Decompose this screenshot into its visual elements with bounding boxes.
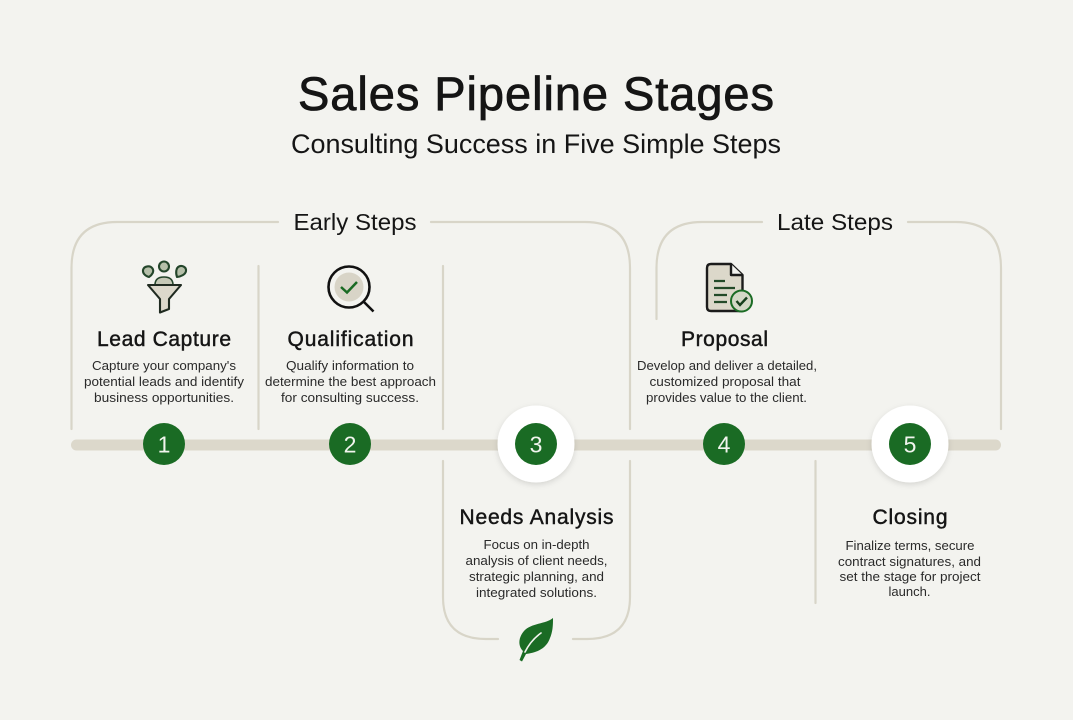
step 5: closing: Closing [872,506,948,529]
step 2: qualification: determine the best approach [265,375,436,389]
step 2: qualification [265,328,436,405]
step 4: proposal: customized proposal that [650,375,801,389]
step 3 marker: 3 [530,432,542,458]
step 1 marker [143,423,185,465]
bracket: late steps [656,222,1001,603]
step 3: needs analysis: analysis of client needs, [466,554,608,568]
step 3: needs analysis: integrated solutions. [476,586,597,600]
heading: early steps: Early Steps [294,209,416,235]
icon: leaf [519,618,553,662]
step 2 marker: 2 [344,432,356,458]
step 5: closing [838,506,981,599]
step 5 marker [872,406,948,482]
title: Sales Pipeline Stages [298,67,774,120]
step 1: lead capture [84,328,245,405]
icon: proposal document [707,264,752,312]
step 4 marker: 4 [718,432,731,458]
step 4 marker [703,423,745,465]
step 5: closing: Finalize terms, secure [846,539,975,553]
bracket: early steps [72,222,630,639]
step 1: lead capture: Lead Capture [97,328,231,351]
step 4: proposal [637,328,817,405]
step 3: needs analysis [460,506,614,600]
step 2: qualification: Qualify information to [286,359,414,373]
step 5 marker: 5 [904,432,916,458]
step 4: proposal: provides value to the client. [646,391,807,405]
step 5: closing: launch. [888,585,930,599]
timeline track [71,440,1001,450]
step 1 marker: 1 [158,432,170,458]
step 5: closing: contract signatures, and [838,555,981,569]
step 2: qualification: for consulting success. [281,391,419,405]
step 5: closing: set the stage for project [840,570,981,584]
step 4: proposal: Proposal [681,328,768,351]
step 4: proposal: Develop and deliver a detailed, [637,359,817,373]
step 2: qualification: Qualification [288,328,414,351]
step 3: needs analysis: Focus on in-depth [484,538,590,552]
step 1: lead capture: business opportunities. [94,391,234,405]
step 3: needs analysis: Needs Analysis [460,506,614,529]
step 2 marker [329,423,371,465]
step 1: lead capture: Capture your company's [92,359,236,373]
icon: magnifier check [328,266,374,312]
icon: lead funnel [143,262,186,312]
step 1: lead capture: potential leads and identify [84,375,245,389]
heading: late steps: Late Steps [777,209,893,235]
subtitle: Consulting Success in Five Simple Steps [291,129,781,159]
step 3: needs analysis: strategic planning, and [469,570,604,584]
step 3 marker [498,406,574,482]
